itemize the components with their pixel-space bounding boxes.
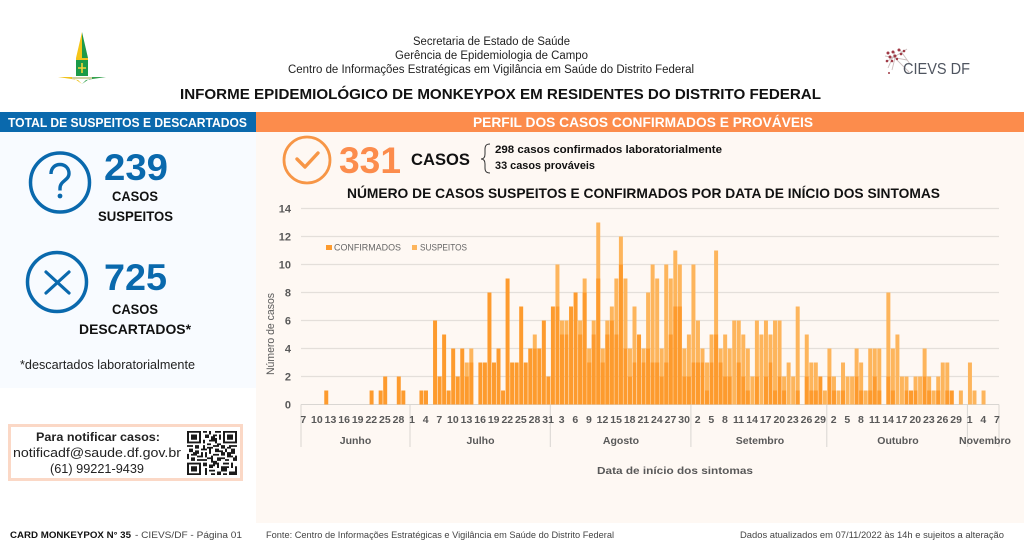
footer: card identification [10, 530, 242, 541]
x axis day labels: 5 [844, 414, 850, 426]
heading: perfil dos casos: PERFIL DOS CASOS CONFIRMADOS E PROVÁVEIS [473, 115, 813, 130]
x axis day labels: 16 [338, 414, 350, 426]
x axis day labels: 23 [787, 414, 799, 426]
stat: casos descartados: CASOS [112, 301, 158, 317]
icon: question mark in circle [30, 153, 90, 212]
x axis day labels: 30 [678, 414, 690, 426]
y axis labels: 12 [279, 232, 291, 244]
bar chart: casos por data de início [265, 204, 1011, 477]
x axis day labels: 24 [651, 414, 663, 426]
x axis day labels: 22 [365, 414, 377, 426]
x axis day labels: 1 [967, 414, 973, 426]
x axis day labels: 31 [542, 414, 554, 426]
heading: perfil dos casos [256, 112, 1024, 132]
x axis day labels: 4 [980, 414, 986, 426]
panel: notification contacts: Para notificar casos: [36, 430, 160, 444]
x axis day labels: 11 [869, 414, 880, 426]
stat: casos descartados: 725 [104, 257, 167, 298]
x axis day labels: 25 [379, 414, 391, 426]
stat: casos descartados [79, 257, 192, 337]
title: INFORME EPIDEMIOLÓGICO DE MONKEYPOX EM RESIDENTES DO DISTRITO FEDERAL [180, 85, 821, 103]
x axis day labels: 7 [436, 414, 442, 426]
x axis day labels: 13 [461, 414, 472, 426]
x axis day labels: 23 [923, 414, 935, 426]
x axis day labels: 28 [529, 414, 540, 426]
x axis day labels: 26 [937, 414, 948, 426]
x axis month labels: Agosto [603, 435, 639, 447]
header: institution lines: Secretaria de Estado de Saúde [413, 36, 570, 48]
logo: CIEVS DF: CIEVS DF [903, 61, 970, 78]
x axis day labels: 15 [610, 414, 622, 426]
y axis labels: 8 [285, 288, 291, 300]
x axis day labels: 25 [515, 414, 527, 426]
x axis day labels: 29 [950, 414, 962, 426]
note: descartados laboratorialmente: *descartados laboratorialmente [20, 358, 195, 372]
legend [326, 242, 467, 254]
x axis month labels [340, 435, 1011, 447]
bars: confirmados [324, 264, 954, 404]
breakdown: confirmados e prováveis: 298 casos confirmados laboratorialmente [495, 144, 722, 156]
x axis day labels: 20 [773, 414, 785, 426]
y axis labels: 4 [285, 344, 292, 356]
header: institution lines [288, 36, 694, 76]
stat: casos descartados: DESCARTADOS* [79, 321, 192, 337]
icon: X in circle [28, 252, 86, 312]
heading: total de suspeitos e descartados: TOTAL DE SUSPEITOS E DESCARTADOS [8, 115, 247, 130]
icon: check in circle [284, 137, 330, 183]
x axis day labels: 14 [882, 414, 894, 426]
chart title: NÚMERO DE CASOS SUSPEITOS E CONFIRMADOS POR DATA DE INÍCIO DOS SINTOMAS [347, 184, 940, 201]
bars: suspeitos [465, 222, 986, 404]
icon: QR code [187, 431, 237, 475]
header: institution lines: Gerência de Epidemiologia de Campo [395, 50, 588, 62]
x axis day labels: 6 [572, 414, 578, 426]
x axis day labels: 12 [597, 414, 608, 426]
legend: CONFIRMADOS [334, 242, 401, 254]
panel: perfil dos casos confirmados e prováveis [256, 112, 1024, 523]
x axis day labels: 14 [746, 414, 758, 426]
stat: casos suspeitos: CASOS [112, 188, 158, 204]
panel: total de suspeitos e descartados [0, 112, 256, 388]
x axis day labels: 5 [708, 414, 714, 426]
x axis day labels: 10 [447, 414, 459, 426]
x axis day labels: 29 [814, 414, 826, 426]
x axis day labels: 22 [501, 414, 513, 426]
x axis title: Data de início dos sintomas [597, 465, 753, 477]
x axis month labels: Novembro [959, 435, 1011, 447]
y axis title: Número de casos [265, 293, 277, 375]
x axis day labels: 19 [352, 414, 364, 426]
x axis day labels: 9 [586, 414, 592, 426]
x axis day labels: 26 [801, 414, 812, 426]
x axis day labels: 17 [896, 414, 908, 426]
x axis day labels: 16 [474, 414, 486, 426]
stat: casos suspeitos [98, 147, 173, 224]
x axis day labels: 17 [760, 414, 772, 426]
x axis day labels: 4 [423, 414, 429, 426]
x axis day labels: 10 [311, 414, 323, 426]
x axis day labels: 18 [624, 414, 636, 426]
x axis month labels: Setembro [736, 435, 784, 447]
x axis day labels: 1 [409, 414, 415, 426]
stat: 331 casos: 331 [339, 140, 401, 181]
header: institution lines: Centro de Informações Estratégicas em Vigilância em Saúde do Distrito Federal [288, 64, 694, 76]
x axis month labels: Junho [340, 435, 371, 447]
icon: brace [481, 144, 490, 173]
footer: update date: Dados atualizados em 07/11/2022 às 14h e sujeitos a alteração [740, 530, 1004, 540]
legend: SUSPEITOS [420, 242, 467, 254]
x axis day labels: 2 [695, 414, 701, 426]
breakdown: confirmados e prováveis: 33 casos prováveis [495, 160, 595, 172]
stat: casos suspeitos: 239 [104, 147, 168, 188]
y axis labels: 2 [285, 372, 291, 384]
x axis day labels [300, 414, 1000, 426]
footer: card identification: - CIEVS/DF - Página 01 [135, 530, 242, 541]
footer: card identification: CARD MONKEYPOX N° 35 [10, 530, 132, 541]
x axis day labels: 7 [300, 414, 306, 426]
stat: 331 casos [339, 140, 470, 181]
logo: CIEVS DF [885, 48, 970, 78]
x axis day labels: 11 [733, 414, 744, 426]
x axis day labels: 20 [909, 414, 921, 426]
x axis day labels: 7 [994, 414, 1000, 426]
x axis day labels: 3 [559, 414, 565, 426]
panel: notification contacts [10, 426, 242, 480]
x axis day labels: 2 [831, 414, 837, 426]
x axis day labels: 13 [325, 414, 336, 426]
panel: notification contacts: notificadf@saude.df.gov.br [13, 446, 181, 460]
y axis labels: 10 [279, 260, 291, 272]
y axis labels: 6 [285, 316, 291, 328]
x axis month labels: Outubro [877, 435, 919, 447]
breakdown: confirmados e prováveis [495, 144, 722, 172]
stat: casos suspeitos: SUSPEITOS [98, 208, 173, 224]
x axis day labels: 8 [722, 414, 728, 426]
x axis month labels: Julho [466, 435, 494, 447]
y axis labels [279, 204, 292, 412]
x axis day labels: 27 [665, 414, 676, 426]
logo: Distrito Federal emblem [58, 32, 106, 84]
stat: 331 casos: CASOS [411, 150, 470, 169]
x axis day labels: 21 [637, 414, 649, 426]
y axis labels: 14 [279, 204, 292, 216]
x axis day labels: 19 [488, 414, 500, 426]
x axis day labels: 28 [393, 414, 404, 426]
x axis day labels: 8 [858, 414, 864, 426]
footer: source: Fonte: Centro de Informações Estratégicas e Vigilância em Saúde do Distrito Federal [266, 530, 614, 540]
y axis labels: 0 [285, 400, 291, 412]
panel: notification contacts: (61) 99221-9439 [50, 462, 144, 476]
